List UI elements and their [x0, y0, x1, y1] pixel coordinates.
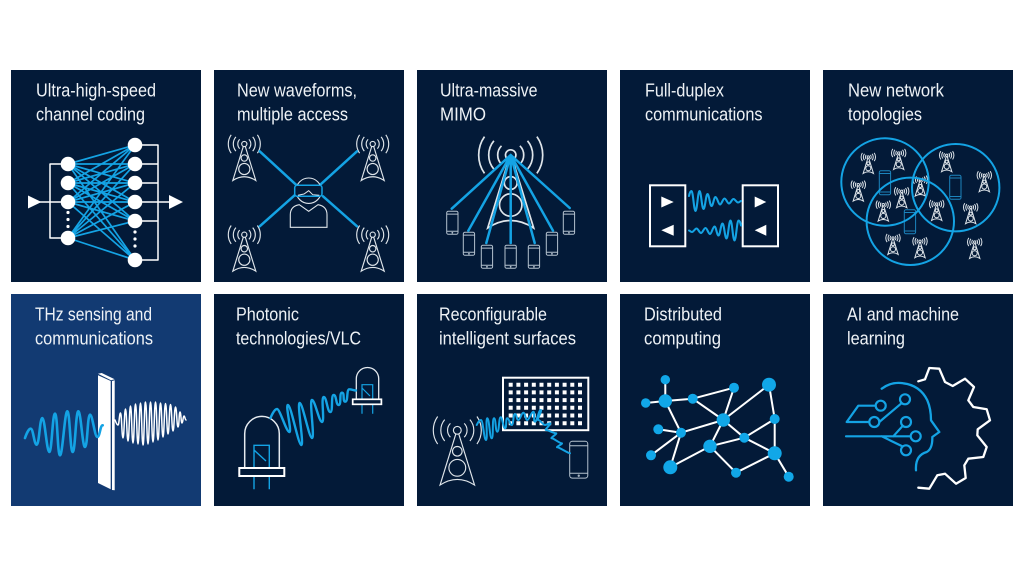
icons: seven phones	[447, 211, 575, 268]
panel: AI and machine learning	[823, 294, 1013, 506]
reflected wave	[477, 410, 570, 453]
heading: topologies	[848, 104, 922, 124]
icon: tower	[433, 416, 481, 485]
transmitted white wave	[115, 402, 186, 445]
overlapping cell circles	[841, 138, 999, 265]
icons: small towers	[851, 149, 992, 258]
network graph	[641, 375, 794, 482]
icon: circuit traces	[846, 394, 921, 455]
heading: channel coding	[36, 104, 145, 124]
panel background	[823, 294, 1013, 506]
heading: communications	[35, 328, 153, 348]
heading: Ultra-massive	[440, 80, 538, 100]
panel background	[214, 294, 404, 506]
heading: MIMO	[440, 104, 486, 124]
heading: computing	[644, 328, 721, 348]
light wave between LEDs	[270, 389, 356, 445]
icon: small LED	[353, 368, 381, 414]
panel background	[620, 70, 810, 282]
panel: New waveforms, multiple access	[214, 70, 404, 282]
icons: four towers	[228, 135, 389, 271]
heading: THz sensing and	[35, 304, 152, 324]
heading: learning	[847, 328, 905, 348]
panel background	[417, 294, 607, 506]
beams from tower to phones	[452, 155, 570, 243]
icon: large tower	[479, 137, 543, 228]
panel: Photonic technologies/VLC	[214, 294, 404, 506]
panel: Distributed computing	[620, 294, 810, 506]
panel background	[214, 70, 404, 282]
panel: New network topologies	[823, 70, 1013, 282]
icon: gear outline	[918, 368, 990, 489]
icons: phones	[879, 171, 961, 234]
panel background	[823, 70, 1013, 282]
panel background	[11, 70, 201, 282]
panel: Full-duplex communications	[620, 70, 810, 282]
heading: communications	[645, 104, 762, 124]
icon: left transceiver	[650, 185, 685, 246]
icon: slab	[98, 373, 115, 490]
panel: THz sensing and communications	[11, 294, 201, 506]
heading: Distributed	[644, 304, 722, 324]
icon: large LED	[239, 416, 284, 489]
heading: AI and machine	[847, 304, 959, 324]
panel background	[11, 294, 201, 506]
icon: head profile	[882, 383, 939, 470]
signal waves	[689, 191, 741, 240]
icon: user with VR goggles	[290, 178, 327, 227]
panel: Ultra-massive MIMO	[417, 70, 607, 282]
heading: multiple access	[237, 104, 348, 124]
diagram: coding graph	[28, 138, 183, 267]
incoming blue wave	[25, 411, 103, 455]
panel background	[620, 294, 810, 506]
heading: Ultra-high-speed	[36, 80, 156, 100]
panel background	[417, 70, 607, 282]
heading: New network	[848, 80, 945, 100]
heading: Photonic	[236, 304, 299, 324]
beams to user	[260, 151, 357, 226]
heading: Reconfigurable	[439, 304, 547, 324]
heading: New waveforms,	[237, 80, 357, 100]
panel: Reconfigurable intelligent surfaces	[417, 294, 607, 506]
icon: phone	[570, 441, 588, 478]
heading: technologies/VLC	[236, 328, 361, 348]
panel: Ultra-high-speed channel coding	[11, 70, 201, 282]
icon: right transceiver	[743, 185, 778, 246]
icon: surface grid	[503, 378, 588, 430]
heading: intelligent surfaces	[439, 328, 576, 348]
heading: Full-duplex	[645, 80, 725, 100]
